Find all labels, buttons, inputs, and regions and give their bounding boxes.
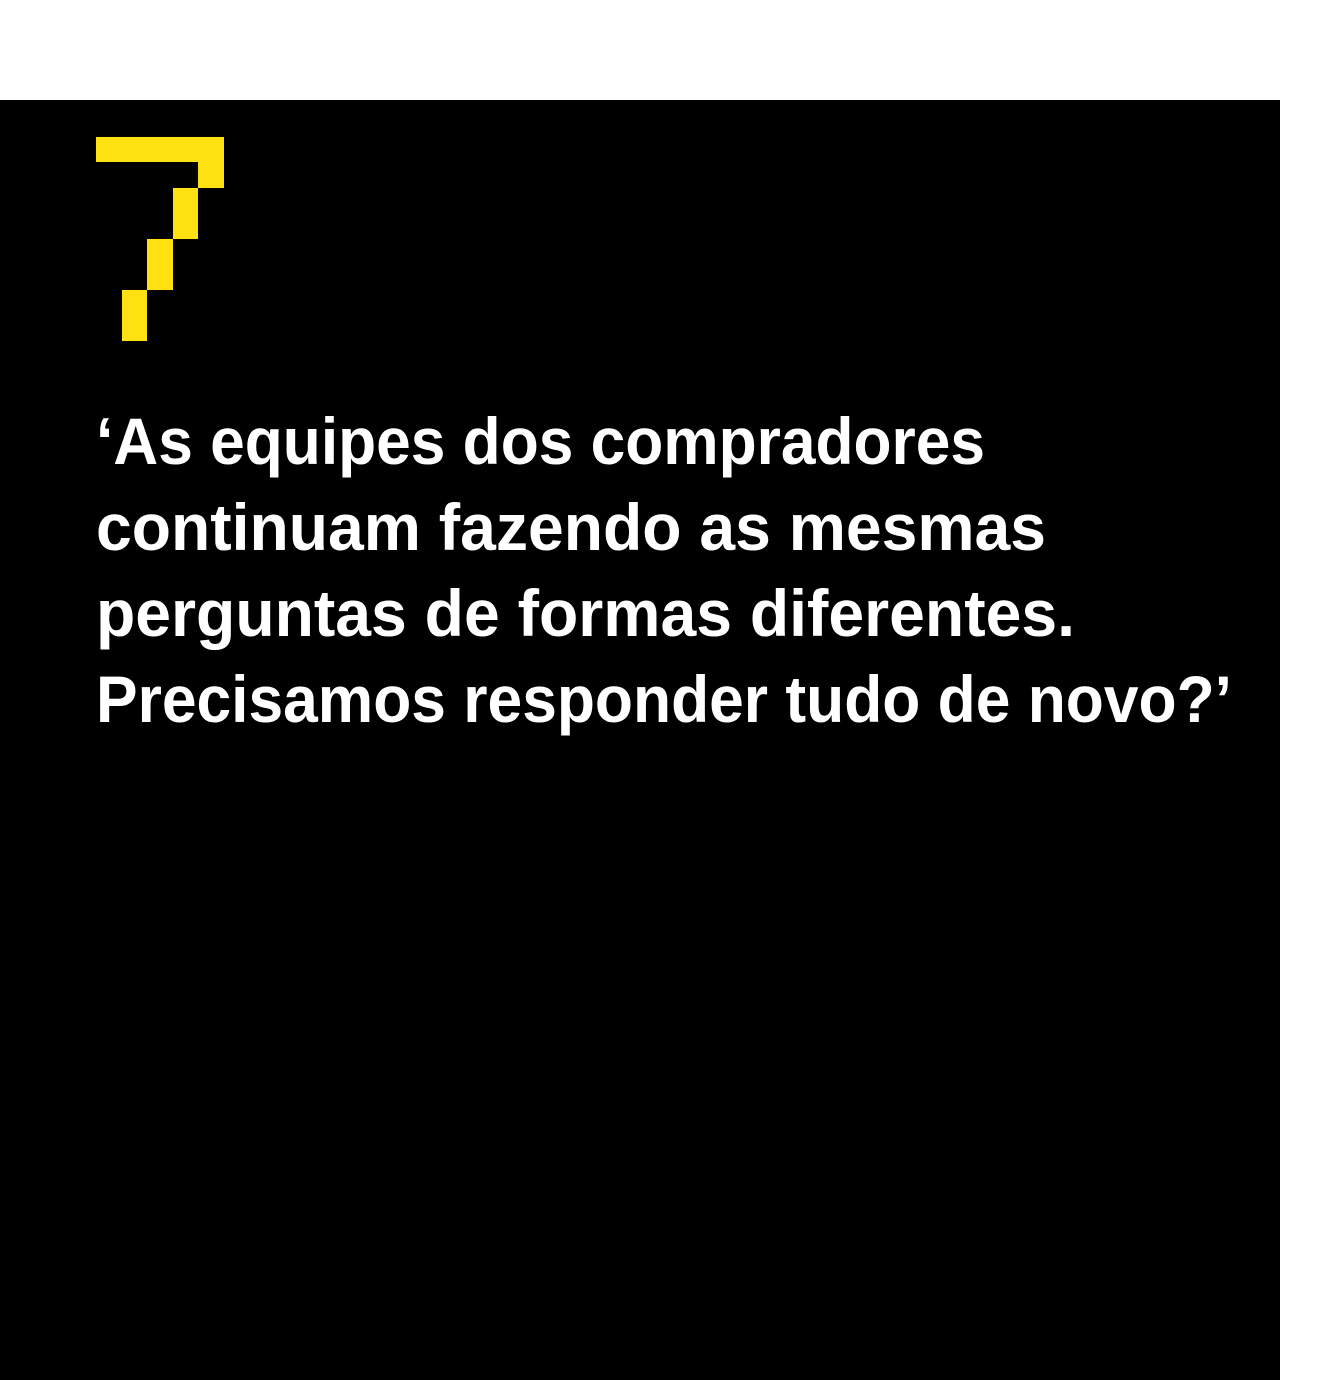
- quote text: ‘As equipes dos compradores: [96, 404, 985, 478]
- icon: pixel number 7: [96, 137, 224, 341]
- quote text: continuam fazendo as mesmas: [96, 490, 1046, 564]
- quote text: Precisamos responder tudo de novo?’: [96, 662, 1232, 736]
- quote text: perguntas de formas diferentes.: [96, 576, 1075, 650]
